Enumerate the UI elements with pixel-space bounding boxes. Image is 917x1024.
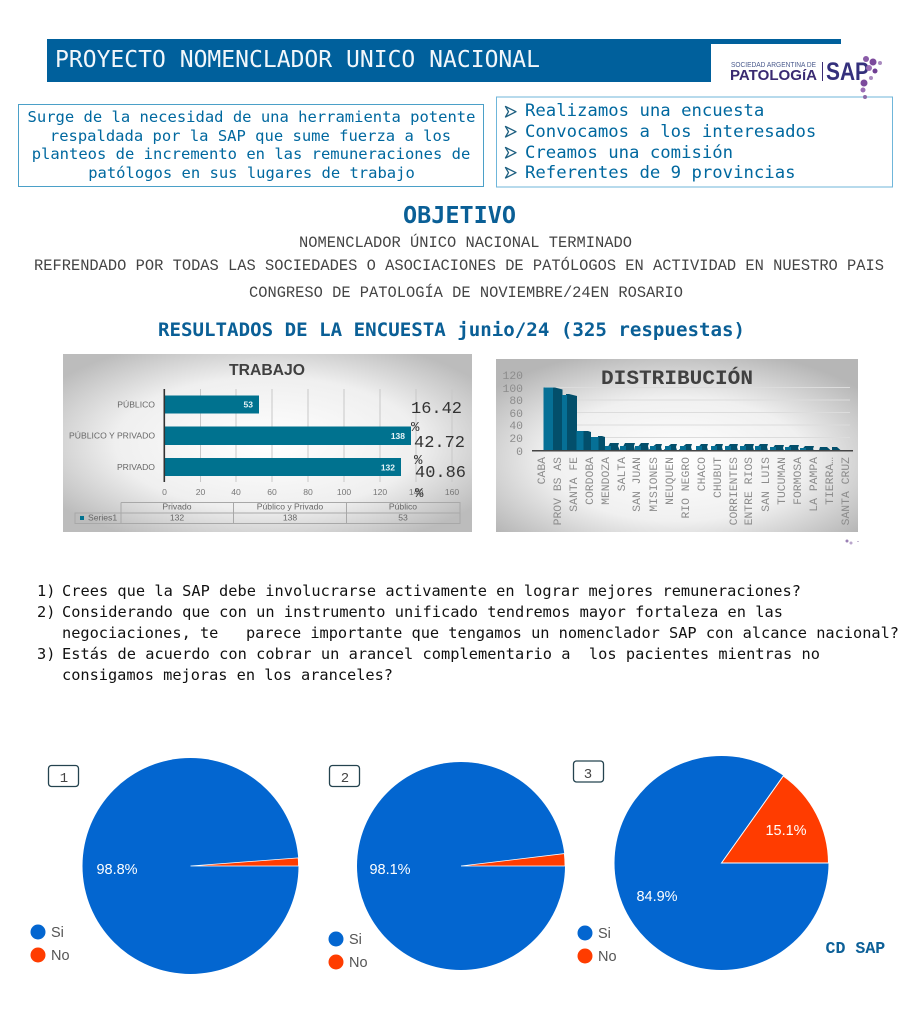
chart: trabajo: 0: [162, 487, 167, 497]
chart: trabajo: 132: [381, 462, 395, 472]
heading: objetivo: OBJETIVO: [403, 203, 516, 229]
panel: origin text box: [18, 104, 484, 186]
text block: survey questions: [37, 582, 899, 684]
panel: actions list: [496, 97, 892, 187]
chart: trabajo: %: [415, 486, 424, 502]
chart: distribucion: 80: [509, 396, 523, 408]
chart: trabajo: 160: [445, 487, 459, 497]
logo: Sociedad Argentina de Patología SAP: PATOLOGíA: [730, 67, 817, 84]
chart: distribucion: SANTA CRUZ: [841, 457, 853, 525]
chart: trabajo: Público y Privado: [257, 502, 323, 512]
logo: Sociedad Argentina de Patología SAP: SAP: [826, 58, 869, 86]
chart: distribucion: 40: [509, 421, 523, 433]
header banner: [47, 39, 841, 82]
pie chart 2: No: [349, 955, 368, 971]
chart: distribucion: MISIONES: [649, 457, 661, 512]
chart: distribucion: MENDOZA: [601, 457, 613, 505]
chart: distribucion: CORRIENTES: [729, 457, 741, 525]
panel: origin text box: planteos de incremento en las remuneraciones de: [32, 145, 470, 163]
chart: trabajo: PÚBLICO: [117, 400, 155, 410]
pie chart 3: [574, 756, 828, 970]
chart: distribucion: PROV BS AS: [553, 457, 565, 525]
text block: survey questions: 1): [37, 582, 55, 600]
text block: survey questions: Crees que la SAP debe involucrarse activamente en lograr mejores remuneraciones?: [62, 582, 801, 600]
panel: actions list: Realizamos una encuesta: [525, 101, 764, 121]
chart: trabajo: PÚBLICO Y PRIVADO: [69, 430, 155, 440]
chart: trabajo: 42.72: [414, 434, 465, 453]
chart: distribucion: 100: [502, 384, 523, 396]
pie chart 3: 84.9%: [636, 889, 678, 905]
chart: trabajo: Público: [389, 502, 417, 512]
chart: distribucion: CHUBUT: [713, 457, 725, 498]
logo: Sociedad Argentina de Patología SAP: SOCIEDAD ARGENTINA DE: [731, 62, 816, 69]
chart: distribucion: SAN JUAN: [632, 457, 644, 512]
chart: trabajo: PRIVADO: [117, 462, 155, 472]
chart: trabajo: 80: [303, 487, 313, 497]
text block: survey questions: consigamos mejoras en los aranceles?: [62, 666, 393, 684]
chart: distribucion: SAN LUIS: [761, 457, 773, 512]
pie chart 1: No: [51, 948, 70, 964]
chart: trabajo: 53: [398, 512, 408, 522]
chart: distribucion: TIERRA…: [825, 457, 837, 505]
credit: CD SAP: CD SAP: [826, 939, 885, 958]
pie chart 1: 98.8%: [96, 862, 138, 878]
chart: trabajo: [63, 354, 472, 532]
text block: survey questions: Considerando que con un instrumento unificado tendremos mayor fortaleza en las: [62, 603, 783, 621]
chart: trabajo: Privado: [162, 502, 192, 512]
chart: distribucion: NEUQUEN: [665, 457, 677, 505]
chart: trabajo: 100: [337, 487, 351, 497]
panel: origin text box: Surge de la necesidad de una herramienta potente: [28, 108, 475, 126]
text block: survey questions: 2): [37, 603, 55, 621]
chart: distribucion: CORDOBA: [585, 457, 597, 505]
chart: trabajo: 20: [196, 487, 205, 497]
text block: survey questions: Estás de acuerdo con cobrar un arancel complementario a los pacientes mientras no: [62, 645, 820, 663]
text block: objetivo: CONGRESO DE PATOLOGÍA DE NOVIEMBRE/24EN ROSARIO: [249, 284, 683, 302]
pie chart 2: Si: [349, 932, 362, 948]
pie chart 3: 3: [584, 767, 592, 783]
text block: survey questions: 3): [37, 645, 55, 663]
chart: trabajo: 40: [231, 487, 241, 497]
chart: trabajo: 138: [391, 431, 405, 441]
pie chart 2: 2: [341, 771, 349, 787]
chart: distribucion: 60: [509, 409, 523, 421]
chart: distribucion: LA PAMPA: [809, 457, 821, 512]
text block: survey questions: negociaciones, te parece importante que tengamos un nomenclador SAP con alcance nacional?: [62, 624, 899, 642]
chart: distribucion: 120: [502, 371, 523, 383]
chart: trabajo: 16.42: [411, 400, 462, 419]
chart: distribucion: ENTRE RIOS: [744, 457, 756, 525]
pie chart 1: [30, 758, 298, 974]
chart: distribucion: CABA: [537, 457, 549, 484]
chart: distribucion: SALTA: [617, 457, 629, 491]
chart: trabajo: 53: [244, 400, 253, 410]
text block: objetivo: REFRENDADO POR TODAS LAS SOCIEDADES O ASOCIACIONES DE PATÓLOGOS EN ACTIVIDAD EN NUESTRO PAIS: [34, 257, 884, 275]
chart: trabajo: 120: [373, 487, 387, 497]
text block: objetivo: [34, 234, 884, 302]
title: PROYECTO NOMENCLADOR UNICO NACIONAL: [55, 47, 540, 73]
panel: origin text box: patólogos en sus lugares de trabajo: [88, 164, 415, 182]
pie chart 1: Si: [51, 925, 64, 941]
pie chart 3: 15.1%: [765, 823, 807, 839]
pie chart 2: 98.1%: [369, 862, 411, 878]
pie chart 3: No: [598, 949, 617, 965]
chart: trabajo: %: [414, 453, 423, 469]
panel: actions list: Creamos una comisión: [525, 143, 733, 163]
chart: distribucion: DISTRIBUCIÓN: [601, 367, 753, 391]
chart: trabajo: 40.86: [415, 464, 466, 483]
panel: origin text box: respaldada por la SAP que sume fuerza a los: [50, 127, 451, 145]
chart: trabajo: 140: [409, 487, 423, 497]
chart: trabajo: Series1: [88, 512, 117, 522]
chart: distribucion: CHACO: [697, 457, 709, 491]
text block: objetivo: NOMENCLADOR ÚNICO NACIONAL TERMINADO: [299, 234, 632, 252]
chart: trabajo: 132: [170, 512, 184, 522]
chart: distribucion: TUCUMAN: [777, 457, 789, 505]
chart: distribucion: 0: [516, 447, 523, 459]
chart: trabajo: 138: [283, 512, 297, 522]
logo: Sociedad Argentina de Patología SAP: [730, 56, 882, 99]
chart: distribucion: RIO NEGRO: [681, 457, 693, 519]
chart: distribucion: [496, 359, 859, 544]
chart: trabajo: 60: [267, 487, 277, 497]
chart: distribucion: 20: [509, 434, 523, 446]
heading: resultados: RESULTADOS DE LA ENCUESTA junio/24 (325 respuestas): [158, 319, 745, 341]
pie chart 3: Si: [598, 926, 611, 942]
chart: distribucion: SANTA FE: [569, 457, 581, 512]
pie chart 1: 1: [60, 771, 68, 787]
pie chart 2: [328, 762, 565, 971]
chart: distribucion: FORMOSA: [793, 457, 805, 505]
chart: trabajo: TRABAJO: [229, 362, 305, 379]
chart: trabajo: %: [411, 420, 420, 436]
panel: actions list: Convocamos a los interesados: [525, 122, 816, 142]
panel: actions list: Referentes de 9 provincias: [525, 163, 796, 183]
